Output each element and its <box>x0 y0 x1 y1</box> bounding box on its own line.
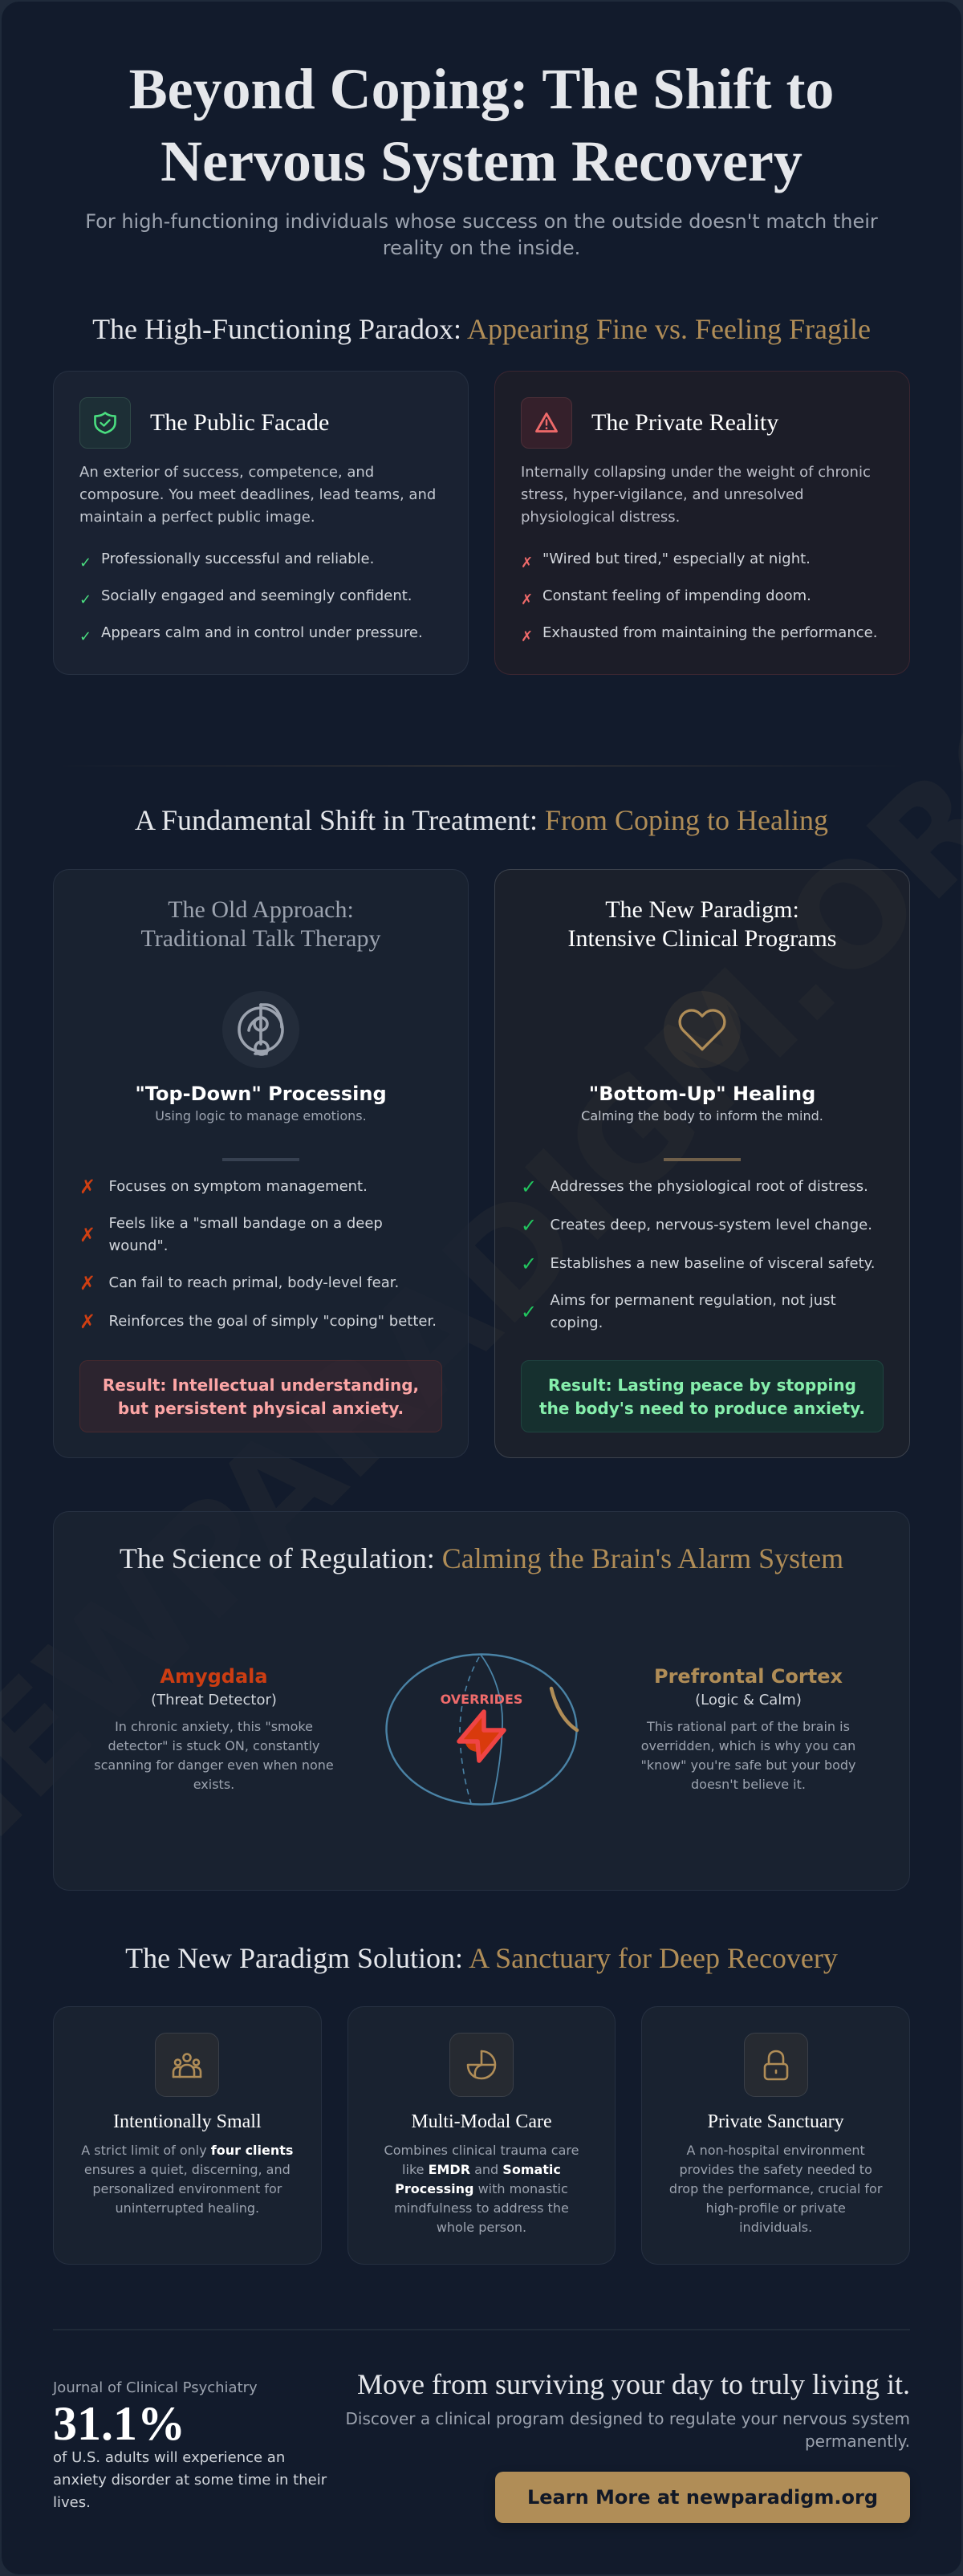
card text: A strict limit of only four clients <box>81 2143 293 2158</box>
icon: shield check <box>79 397 131 449</box>
card text: Processing with monastic <box>395 2181 568 2196</box>
statistic text <box>53 2449 327 2511</box>
heading: paradox: The High-Functioning Paradox: Appearing Fine vs. Feeling Fragile <box>92 313 871 345</box>
card title: The Private Reality <box>591 409 778 436</box>
subtitle <box>85 210 878 259</box>
panel heading: Traditional Talk Therapy <box>141 925 380 952</box>
subtitle: reality on the inside. <box>383 237 580 259</box>
heading: solution: The New Paradigm Solution: A Sanctuary for Deep Recovery <box>125 1942 838 1974</box>
heading: science: The Science of Regulation: Calming the Brain's Alarm System <box>120 1542 843 1574</box>
accent bar <box>222 1158 299 1161</box>
description: stress, hyper-vigilance, and unresolved <box>521 486 804 503</box>
panel: old approach <box>53 869 469 1458</box>
text: prefrontal cortex <box>640 1665 856 1792</box>
description: physiological distress. <box>521 509 680 526</box>
card title: The Public Facade <box>150 409 329 436</box>
card text <box>669 2143 883 2235</box>
cross list: ✗ <box>79 1176 95 1198</box>
text: prefrontal cortex: overridden, which is why you can <box>641 1738 855 1753</box>
subheading: "Bottom-Up" Healing <box>589 1083 815 1105</box>
text: amygdala <box>94 1665 334 1792</box>
title <box>129 57 834 193</box>
panel heading <box>141 896 380 952</box>
check list <box>521 1176 875 1331</box>
source: Journal of Clinical Psychiatry <box>53 2379 258 2396</box>
subheading: "Top-Down" Processing <box>135 1083 387 1105</box>
text: amygdala: exists. <box>193 1777 234 1792</box>
panel: new paradigm <box>494 869 910 1458</box>
description: composure. You meet deadlines, lead teams, and <box>79 486 436 503</box>
panel heading: Intensive Clinical Programs <box>568 925 836 952</box>
panel heading: The Old Approach: <box>168 896 354 923</box>
text: prefrontal cortex: This rational part of the brain is <box>647 1719 850 1734</box>
cross list <box>79 1176 437 1333</box>
cross list: ✗ <box>521 591 533 608</box>
checklist: ✓ <box>79 591 91 608</box>
check list: Creates deep, nervous-system level change. <box>551 1217 872 1233</box>
call to action text <box>346 2368 910 2451</box>
description: An exterior of success, competence, and <box>79 464 374 481</box>
text: amygdala: In chronic anxiety, this "smoke <box>115 1719 313 1734</box>
card text: Combines clinical trauma care <box>384 2143 579 2158</box>
panel heading: The New Paradigm: <box>605 896 799 923</box>
result callout <box>521 1360 884 1432</box>
panel heading <box>568 896 836 952</box>
cta heading: Move from surviving your day to truly living it. <box>357 2368 910 2400</box>
accent bar <box>664 1158 741 1161</box>
text: amygdala: Amygdala <box>160 1665 268 1688</box>
card text: whole person. <box>437 2220 526 2235</box>
cross list: "Wired but tired," especially at night. <box>542 551 811 567</box>
checklist: ✓ <box>79 555 91 571</box>
cross list: Feels like a "small bandage on a deep <box>109 1215 383 1232</box>
statistic text: lives. <box>53 2494 91 2511</box>
card text: drop the performance, crucial for <box>669 2181 882 2196</box>
cross list: wound". <box>109 1237 168 1254</box>
check list: coping. <box>551 1314 603 1331</box>
card text: provides the safety needed to <box>679 2162 872 2177</box>
check list: Aims for permanent regulation, not just <box>551 1292 836 1309</box>
panel: science of regulation <box>53 1511 910 1891</box>
result callout: Result: Intellectual understanding, <box>103 1375 419 1395</box>
description <box>79 464 436 526</box>
cross list: Exhausted from maintaining the performance. <box>542 624 877 641</box>
cross list: ✗ <box>79 1310 95 1333</box>
cta text: Discover a clinical program designed to regulate your nervous system <box>346 2409 910 2428</box>
text: prefrontal cortex: Prefrontal Cortex <box>654 1665 843 1688</box>
cross list: Constant feeling of impending doom. <box>542 587 811 604</box>
check list: ✓ <box>521 1176 537 1198</box>
card: multi-modal care <box>347 2006 616 2265</box>
title: Beyond Coping: The Shift to <box>129 57 834 121</box>
icon: heart <box>664 991 741 1068</box>
check list: ✓ <box>521 1214 537 1237</box>
cross list: ✗ <box>521 555 533 571</box>
text: prefrontal cortex: (Logic & Calm) <box>695 1692 802 1709</box>
caption: Calming the body to inform the mind. <box>581 1108 823 1123</box>
icon: warning triangle <box>521 397 572 449</box>
card text: ensures a quiet, discerning, and <box>84 2162 291 2177</box>
checklist: Socially engaged and seemingly confident. <box>101 587 412 604</box>
card text: personalized environment for <box>92 2181 282 2196</box>
card text <box>384 2143 579 2235</box>
checklist: Appears calm and in control under pressure. <box>101 624 423 641</box>
checklist: ✓ <box>79 628 91 645</box>
brain diagram <box>385 1653 579 1806</box>
footer divider <box>53 2329 910 2330</box>
statistic text: of U.S. adults will experience an <box>53 2449 285 2466</box>
icon: pie <box>449 2033 514 2097</box>
cross list: ✗ <box>521 628 533 645</box>
cta text <box>346 2409 910 2451</box>
check list: Addresses the physiological root of distress. <box>551 1178 868 1195</box>
card text: A non-hospital environment <box>687 2143 865 2158</box>
cross list: ✗ <box>79 1272 95 1294</box>
description: maintain a perfect public image. <box>79 509 315 526</box>
cross list: Reinforces the goal of simply "coping" better. <box>109 1313 437 1330</box>
cta text: permanently. <box>805 2432 910 2451</box>
description <box>521 464 871 526</box>
cross list: Focuses on symptom management. <box>109 1178 368 1195</box>
card text: mindfulness to address the <box>394 2200 569 2216</box>
checklist: Professionally successful and reliable. <box>101 551 374 567</box>
result callout <box>79 1360 442 1432</box>
brain diagram: OVERRIDES <box>441 1692 522 1707</box>
card: private sanctuary <box>641 2006 910 2265</box>
card: intentionally small <box>53 2006 322 2265</box>
check list: ✓ <box>521 1253 537 1275</box>
result callout: the body's need to produce anxiety. <box>539 1398 865 1417</box>
check list: ✓ <box>521 1301 537 1323</box>
card text <box>81 2143 293 2216</box>
heading: treatment shift: A Fundamental Shift in Treatment: From Coping to Healing <box>135 804 828 836</box>
panel: private reality <box>494 371 910 675</box>
description: Internally collapsing under the weight of chronic <box>521 464 871 481</box>
check list: Establishes a new baseline of visceral safety. <box>551 1255 875 1272</box>
icon: brain <box>222 991 299 1068</box>
icon: lock <box>744 2033 808 2097</box>
result callout: but persistent physical anxiety. <box>118 1398 404 1417</box>
card title: Multi-Modal Care <box>411 2111 552 2132</box>
icon: people <box>155 2033 219 2097</box>
card text: uninterrupted healing. <box>116 2200 259 2216</box>
title: Nervous System Recovery <box>160 129 802 193</box>
button: Learn More at newparadigm.org <box>527 2486 878 2509</box>
card text: like EMDR and Somatic <box>402 2162 561 2177</box>
card text: high-profile or private <box>706 2200 846 2216</box>
result callout: Result: Lasting peace by stopping <box>548 1375 856 1395</box>
caption: Using logic to manage emotions. <box>155 1108 367 1123</box>
card title: Intentionally Small <box>113 2111 262 2132</box>
statistic text: anxiety disorder at some time in their <box>53 2472 327 2489</box>
card text: individuals. <box>739 2220 812 2235</box>
cross list: Can fail to reach primal, body-level fear. <box>109 1274 399 1291</box>
text: amygdala: detector" is stuck ON, constantly <box>108 1738 319 1753</box>
cross list: ✗ <box>79 1224 95 1246</box>
button <box>495 2472 910 2523</box>
text: prefrontal cortex: doesn't believe it. <box>691 1777 806 1792</box>
number: 31.1% <box>53 2397 185 2450</box>
cross list <box>521 551 877 645</box>
checklist <box>79 551 423 645</box>
subtitle: For high-functioning individuals whose success on the outside doesn't match their <box>85 210 878 233</box>
panel: public facade <box>53 371 469 675</box>
card title: Private Sanctuary <box>708 2111 844 2132</box>
text: prefrontal cortex: "know" you're safe but your body <box>640 1757 856 1773</box>
text: amygdala: scanning for danger even when none <box>94 1757 334 1773</box>
statistic block <box>52 2379 327 2511</box>
text: amygdala: (Threat Detector) <box>151 1692 277 1709</box>
